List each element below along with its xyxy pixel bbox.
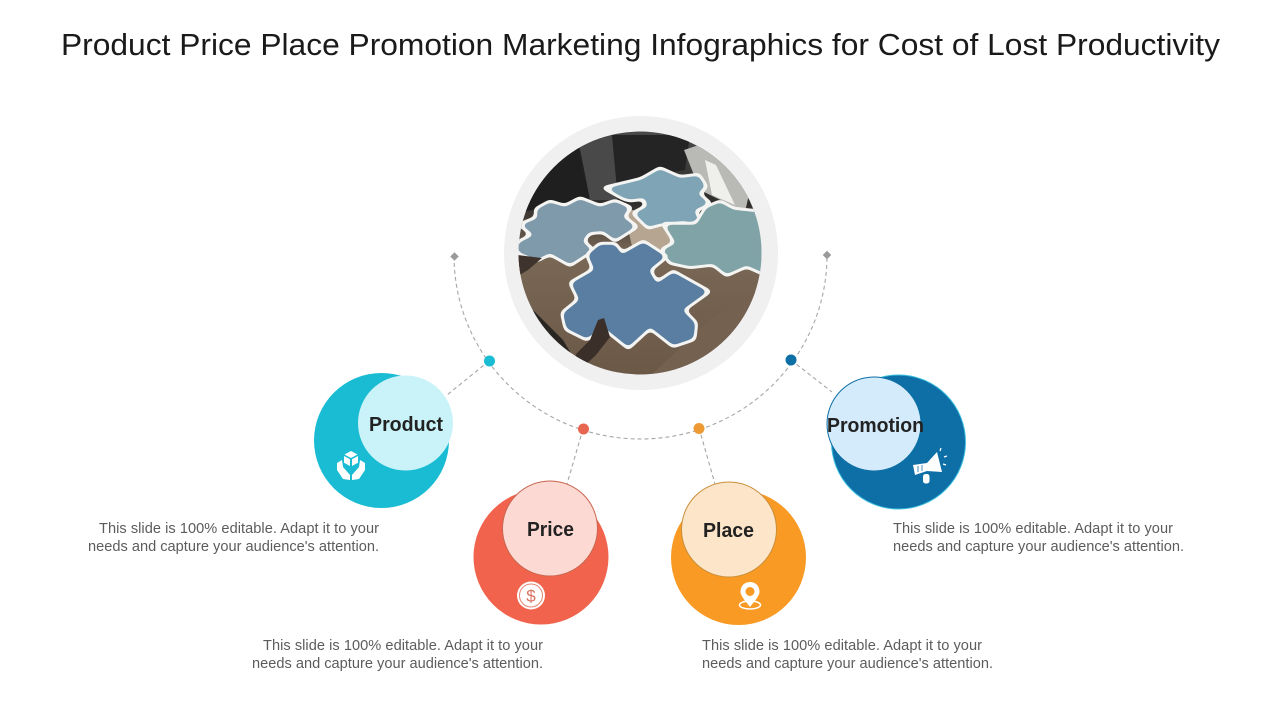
text block: Price description: This slide is 100% editable. Adapt it to your: [263, 638, 543, 654]
panel: Product: [314, 356, 495, 508]
text block: Promotion description: [893, 521, 1184, 555]
icon: hands holding box: [337, 451, 365, 480]
text block: Product description: This slide is 100% editable. Adapt it to your: [99, 521, 379, 537]
panel: Price: [474, 424, 608, 624]
text block: Promotion description: needs and capture your audience's attention.: [893, 539, 1184, 555]
label: Promotion: Promotion: [827, 415, 924, 437]
title: Product Price Place Promotion Marketing Infographics for Cost of Lost Productivity: [61, 27, 1221, 62]
text block: Place description: This slide is 100% editable. Adapt it to your: [702, 638, 982, 654]
central photo with puzzle pieces: [504, 116, 778, 390]
panel: Promotion: [786, 354, 966, 509]
icon: megaphone: [913, 448, 947, 484]
hand: left: [518, 255, 542, 276]
icon: dollar coin: $: [526, 586, 536, 606]
end marker: left diamond: [450, 252, 459, 261]
puzzle piece: bottom: [563, 243, 707, 347]
puzzle piece: left: [518, 199, 635, 264]
label: Price: Price: [527, 519, 574, 541]
text block: Place description: [702, 638, 993, 672]
icon: location pin: [740, 582, 760, 609]
text block: Promotion description: This slide is 100% editable. Adapt it to your: [893, 521, 1173, 537]
text block: Product description: [88, 521, 379, 555]
icon: dollar coin: [517, 582, 545, 610]
dashed arc connecting the four circles: [454, 255, 827, 439]
label: Place: Place: [703, 520, 754, 542]
label: Product: Product: [369, 414, 443, 436]
end marker: right diamond: [823, 251, 831, 259]
hand: bottom: [576, 318, 610, 363]
text block: Place description: needs and capture your audience's attention.: [702, 656, 993, 672]
puzzle piece: top: [607, 169, 708, 227]
text block: Price description: [252, 638, 543, 672]
text block: Product description: needs and capture your audience's attention.: [88, 539, 379, 555]
panel: Place: [671, 423, 806, 625]
puzzle piece: right: [663, 203, 765, 274]
text block: Price description: needs and capture your audience's attention.: [252, 656, 543, 672]
